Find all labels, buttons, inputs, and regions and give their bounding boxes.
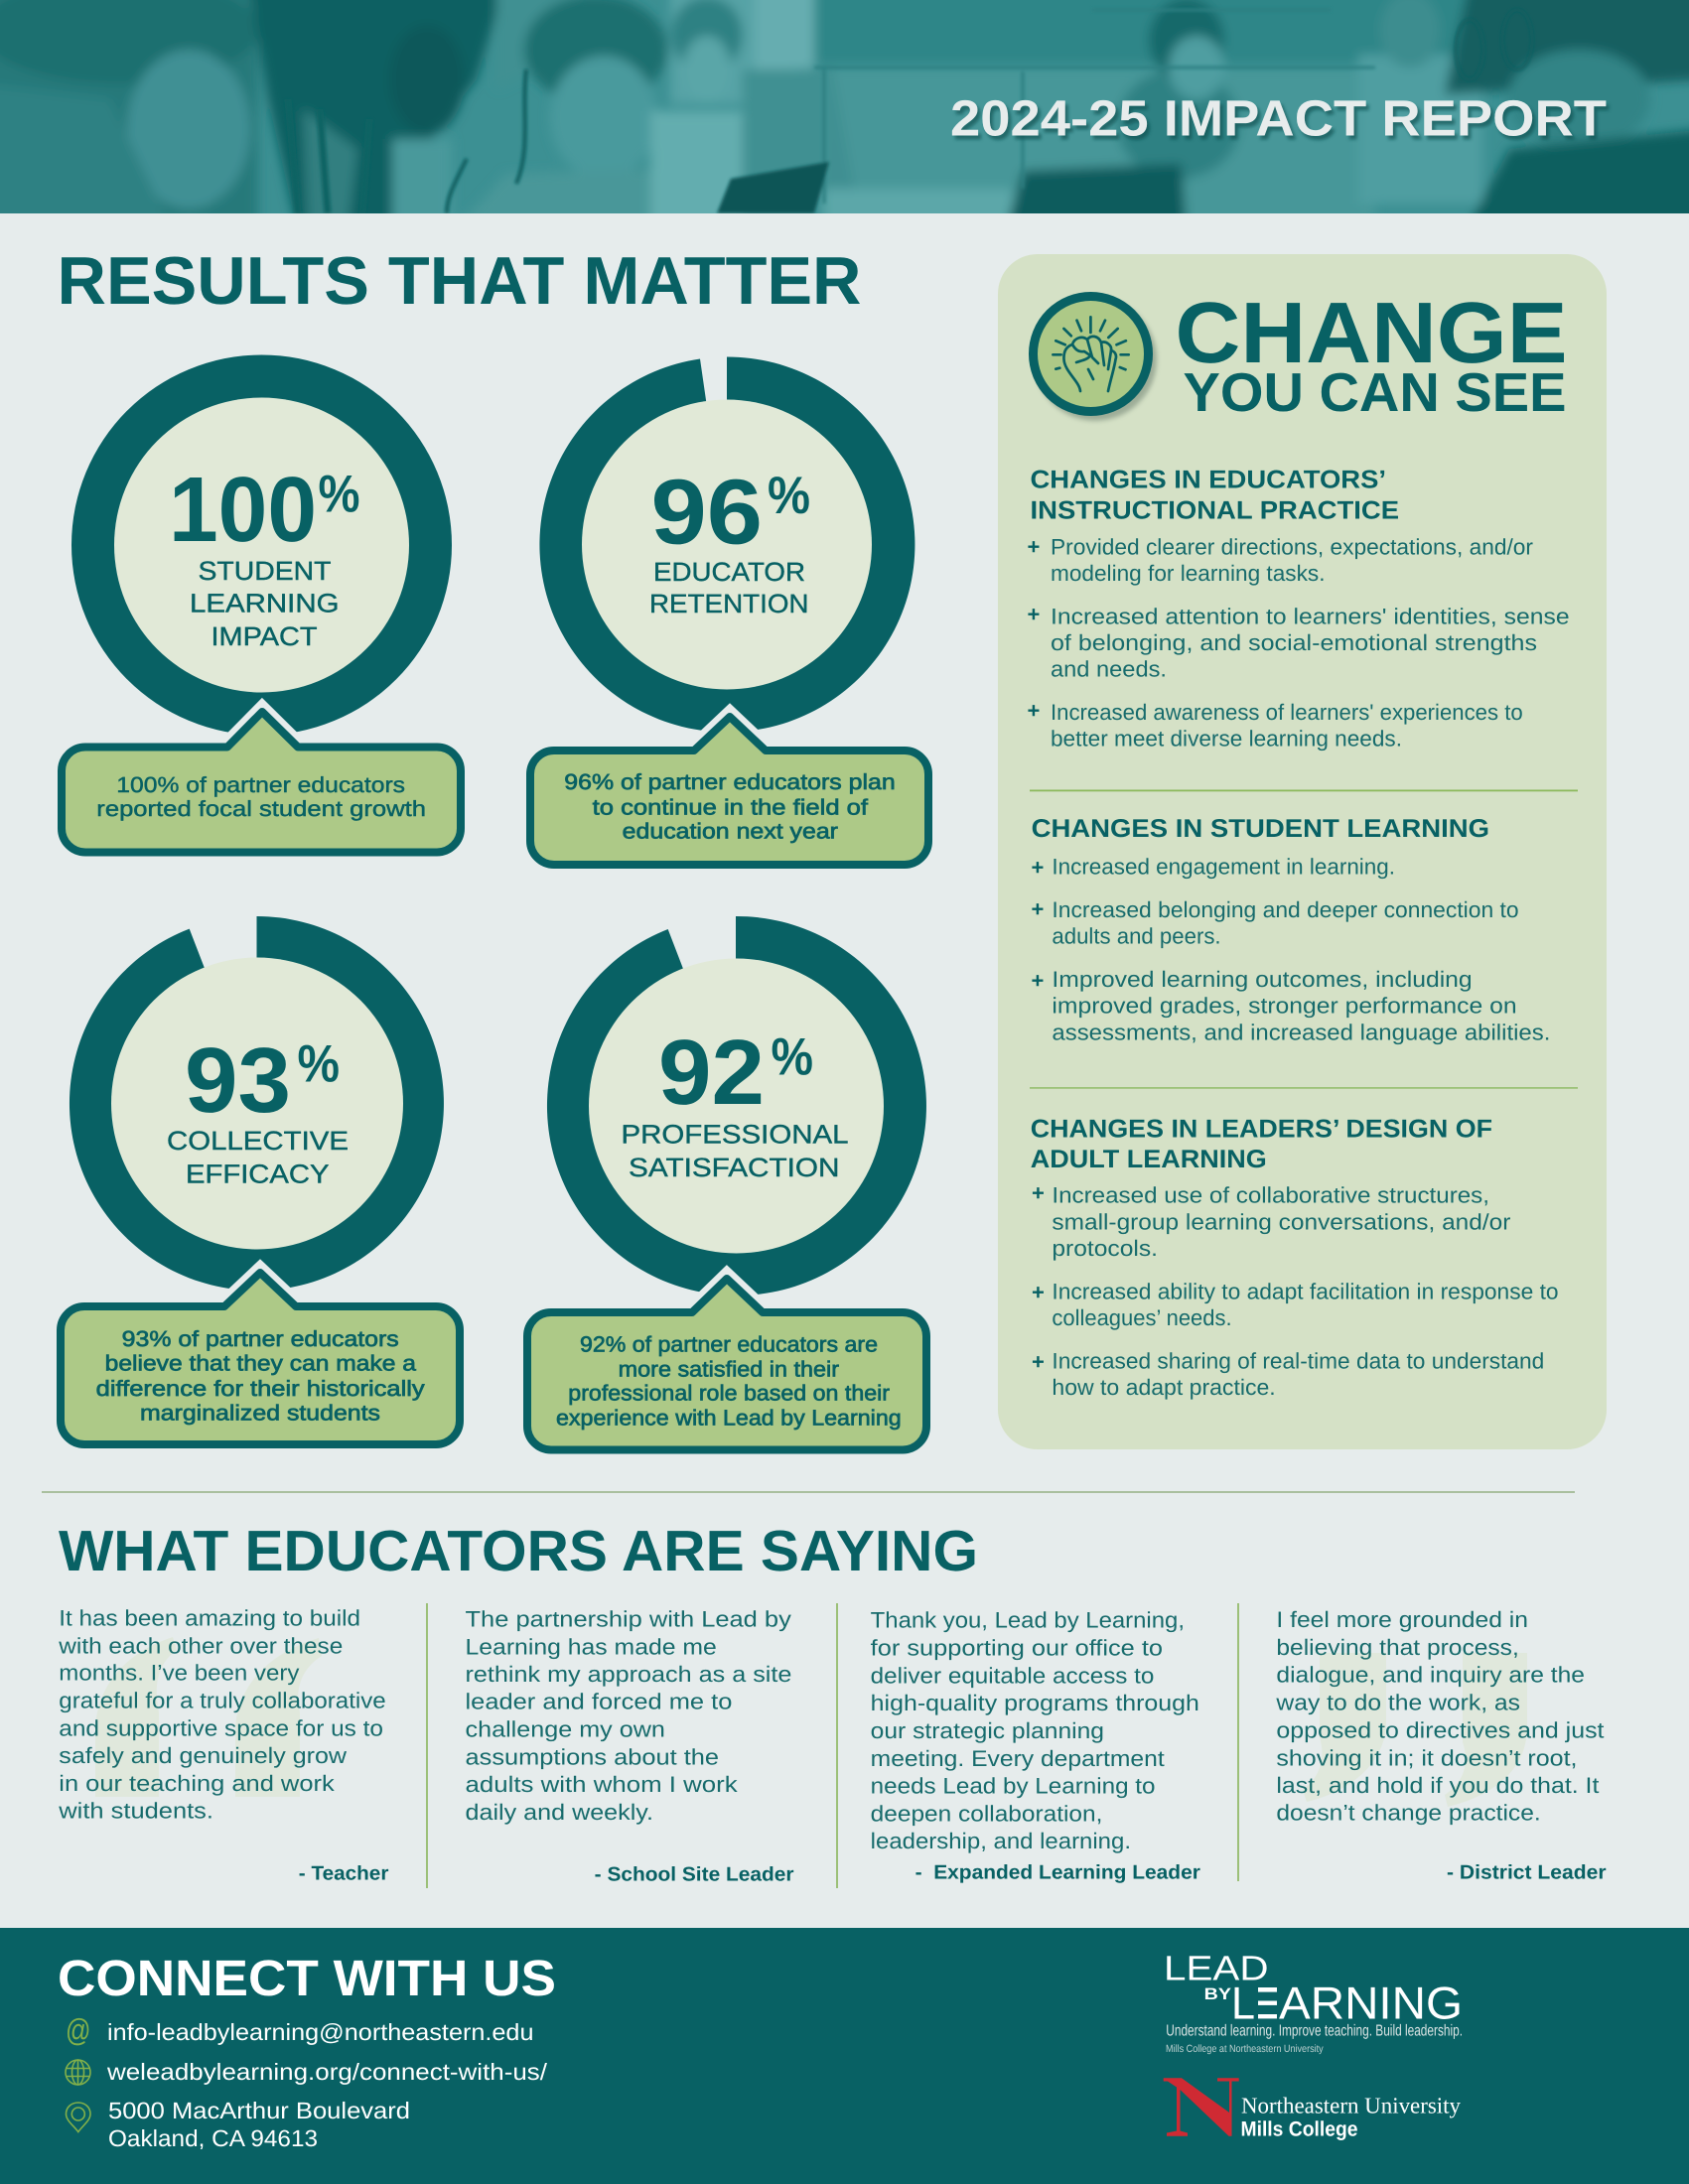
label: SATISFACTION bbox=[629, 1153, 840, 1182]
quote: teacher: months. I’ve been very bbox=[59, 1661, 300, 1686]
callout 100%: reported focal student growth bbox=[96, 796, 426, 821]
quote: expanded learning leader: for supporting our office to bbox=[871, 1636, 1163, 1661]
section: changes in student learning: Increased belonging and deeper connection to bbox=[1052, 897, 1519, 922]
decorative closing quote mark bbox=[1303, 1653, 1527, 1807]
quote: teacher: - Teacher bbox=[299, 1862, 389, 1884]
section: changes in student learning bbox=[1031, 815, 1550, 1044]
quote: teacher: with each other over these bbox=[58, 1633, 343, 1658]
stat: 100% student learning impact bbox=[62, 355, 461, 852]
label: PROFESSIONAL bbox=[622, 1120, 848, 1150]
section: changes in leaders' design of adult learning: Increased sharing of real-time data to understand bbox=[1052, 1348, 1544, 1373]
header photo banner bbox=[0, 0, 1689, 213]
label bbox=[622, 1120, 848, 1182]
callout 96%: 96% of partner educators plan bbox=[564, 769, 896, 794]
section: changes in educators' instructional practice: and needs. bbox=[1051, 657, 1167, 682]
header title: 2024-25 IMPACT REPORT bbox=[953, 93, 1610, 151]
quote: teacher: and supportive space for us to bbox=[59, 1715, 383, 1740]
section: changes in educators' instructional practice: of belonging, and social-emotional strengths bbox=[1051, 630, 1537, 655]
section: changes in educators' instructional practice bbox=[1027, 467, 1570, 751]
section: changes in student learning: Increased engagement in learning. bbox=[1052, 855, 1395, 880]
section: changes in student learning: + bbox=[1031, 855, 1044, 880]
callout 100%: 100% of partner educators bbox=[116, 772, 405, 797]
logo: northeastern university mills college: Northeastern University bbox=[1241, 2093, 1461, 2117]
logo: lead by learning: Mills College at Northeastern University bbox=[1166, 2043, 1324, 2055]
section: changes in leaders' design of adult learning: + bbox=[1032, 1349, 1045, 1374]
quote: district leader: last, and hold if you do that. It bbox=[1276, 1773, 1600, 1798]
stat: 93% collective efficacy bbox=[61, 916, 460, 1444]
section: changes in leaders' design of adult learning: Increased ability to adapt facilitation in response to bbox=[1052, 1279, 1559, 1303]
section heading: results that matter: RESULTS THAT MATTER bbox=[58, 243, 862, 319]
callout 92%: experience with Lead by Learning bbox=[556, 1405, 902, 1430]
quote: school site leader: challenge my own bbox=[465, 1717, 665, 1742]
inner circle bbox=[582, 399, 872, 689]
quote: teacher: in our teaching and work bbox=[59, 1771, 336, 1796]
callout 92%: more satisfied in their bbox=[619, 1356, 839, 1381]
panel title: CHANGE bbox=[1176, 285, 1567, 381]
quote: district leader: opposed to directives and just bbox=[1276, 1717, 1605, 1742]
quote: district leader: - District Leader bbox=[1447, 1862, 1607, 1884]
inner circle bbox=[114, 397, 409, 693]
donut ring 100% bbox=[71, 355, 452, 735]
value 96 percent: % bbox=[768, 467, 810, 525]
header title: 2024-25 IMPACT REPORT bbox=[950, 90, 1607, 147]
quote: district leader: I feel more grounded in bbox=[1276, 1607, 1528, 1632]
section: changes in student learning: adults and peers. bbox=[1052, 924, 1221, 949]
quote: expanded learning leader: - Expanded Learning Leader bbox=[915, 1862, 1200, 1884]
callout 93%: 93% of partner educators bbox=[122, 1326, 399, 1351]
label: COLLECTIVE bbox=[167, 1126, 349, 1156]
contact: website: weleadbylearning.org/connect-with-us/ bbox=[106, 2059, 548, 2085]
logo: lead by learning: ARNING bbox=[1279, 1977, 1463, 2028]
section: changes in leaders' design of adult learning: protocols. bbox=[1052, 1236, 1158, 1261]
quote: teacher: It has been amazing to build bbox=[59, 1605, 360, 1630]
connect heading: CONNECT WITH US bbox=[58, 1950, 556, 2006]
quote: school site leader: assumptions about the bbox=[465, 1745, 719, 1770]
logo: lead by learning bbox=[1164, 1949, 1463, 2055]
value 92 percent bbox=[658, 1021, 813, 1124]
inner circle bbox=[111, 957, 403, 1249]
value 100 percent: 100 bbox=[169, 458, 317, 561]
contact: email: @ bbox=[66, 2012, 91, 2048]
quote: expanded learning leader: deepen collaboration, bbox=[871, 1801, 1102, 1826]
callout 93% bbox=[61, 1273, 460, 1444]
quote: expanded learning leader: meeting. Every department bbox=[871, 1746, 1166, 1771]
label: STUDENT bbox=[199, 556, 332, 586]
value 92 percent: 92 bbox=[658, 1021, 765, 1124]
quote: school site leader: adults with whom I work bbox=[465, 1772, 739, 1797]
section: changes in educators' instructional practice: Increased attention to learners' identities, sense bbox=[1051, 604, 1570, 628]
quote: expanded learning leader: high-quality programs through bbox=[871, 1691, 1199, 1715]
contact: address: 5000 MacArthur Boulevard bbox=[108, 2098, 410, 2123]
logo: lead by learning: BY bbox=[1204, 1985, 1231, 2003]
callout 100% bbox=[62, 712, 461, 852]
value 93 percent bbox=[185, 1028, 340, 1132]
section: changes in educators' instructional practice: Increased awareness of learners' experiences to bbox=[1051, 700, 1523, 725]
section: changes in leaders' design of adult learning: + bbox=[1032, 1180, 1045, 1205]
label: EDUCATOR bbox=[653, 557, 805, 587]
callout 96%: education next year bbox=[623, 818, 838, 844]
contact: email bbox=[66, 2012, 534, 2048]
section: changes in educators' instructional practice: modeling for learning tasks. bbox=[1051, 561, 1325, 586]
quote: school site leader: - School Site Leader bbox=[595, 1863, 794, 1885]
panel: change you can see bbox=[998, 254, 1607, 1449]
value 96 percent: 96 bbox=[651, 461, 763, 564]
quote: district leader: dialogue, and inquiry are the bbox=[1276, 1663, 1585, 1688]
section: changes in educators' instructional practice: + bbox=[1027, 698, 1040, 723]
section: changes in educators' instructional practice: Provided clearer directions, expectations, and/or bbox=[1051, 534, 1534, 559]
section: changes in student learning: CHANGES IN STUDENT LEARNING bbox=[1032, 815, 1489, 843]
section: changes in educators' instructional practice: + bbox=[1027, 602, 1040, 626]
quote: expanded learning leader: deliver equitable access to bbox=[871, 1663, 1154, 1688]
quote: school site leader: The partnership with Lead by bbox=[465, 1606, 792, 1631]
quote: district leader: way to do the work, as bbox=[1275, 1690, 1520, 1714]
section: changes in educators' instructional practice: INSTRUCTIONAL PRACTICE bbox=[1031, 496, 1399, 524]
quote: district leader: shoving it in; it doesn’t root, bbox=[1276, 1745, 1577, 1770]
logo: lead by learning: L bbox=[1231, 1977, 1255, 2028]
callout 92%: 92% of partner educators are bbox=[580, 1332, 878, 1357]
quote: teacher: grateful for a truly collaborative bbox=[59, 1688, 386, 1712]
callout 92% bbox=[527, 1279, 926, 1449]
section: changes in student learning: Improved learning outcomes, including bbox=[1052, 967, 1473, 992]
callout 93%: believe that they can make a bbox=[105, 1350, 417, 1376]
quote: teacher bbox=[58, 1605, 389, 1884]
quote: teacher: with students. bbox=[58, 1799, 213, 1824]
value 100 percent: % bbox=[318, 465, 359, 524]
quote: teacher: safely and genuinely grow bbox=[59, 1743, 348, 1768]
section: changes in student learning: + bbox=[1031, 896, 1044, 921]
donut ring 93% bbox=[70, 916, 444, 1291]
label: RETENTION bbox=[649, 589, 808, 618]
section: changes in leaders' design of adult learning: Increased use of collaborative structures, bbox=[1052, 1183, 1489, 1208]
section: changes in leaders' design of adult learning: small-group learning conversations, and/or bbox=[1052, 1209, 1511, 1234]
section: changes in student learning: improved grades, stronger performance on bbox=[1052, 994, 1517, 1019]
section: changes in educators' instructional practice: better meet diverse learning needs. bbox=[1051, 727, 1402, 751]
donut ring 92% bbox=[547, 916, 926, 1296]
callout 96% bbox=[530, 717, 928, 865]
section: changes in leaders' design of adult learning: + bbox=[1032, 1280, 1045, 1304]
value 93 percent: 93 bbox=[185, 1028, 291, 1132]
label: LEARNING bbox=[190, 588, 340, 617]
callout 93%: marginalized students bbox=[140, 1401, 380, 1426]
donut ring 96% bbox=[539, 356, 915, 732]
logo: lead by learning: LEAD bbox=[1164, 1949, 1269, 1987]
value 96 percent bbox=[651, 461, 810, 564]
value 92 percent: % bbox=[771, 1028, 813, 1086]
label bbox=[167, 1126, 349, 1189]
inner circle bbox=[589, 959, 884, 1253]
callout 96%: to continue in the field of bbox=[593, 794, 869, 819]
footer band bbox=[0, 1928, 1689, 2184]
quote: school site leader: leader and forced me to bbox=[465, 1690, 732, 1714]
quote: district leader bbox=[1275, 1607, 1607, 1884]
quote: expanded learning leader: Thank you, Lead by Learning, bbox=[871, 1607, 1185, 1632]
section: changes in student learning: assessments, and increased language abilities. bbox=[1052, 1020, 1550, 1044]
quote: school site leader: Learning has made me bbox=[465, 1634, 717, 1659]
logo: northeastern university mills college bbox=[1164, 2078, 1461, 2141]
section: changes in leaders' design of adult learning: ADULT LEARNING bbox=[1031, 1146, 1267, 1173]
quote: district leader: believing that process, bbox=[1276, 1635, 1519, 1660]
logo: northeastern university mills college: Mills College bbox=[1241, 2118, 1358, 2141]
section: changes in student learning: + bbox=[1031, 968, 1044, 993]
section: changes in leaders' design of adult learning: how to adapt practice. bbox=[1052, 1375, 1276, 1400]
callout 92%: professional role based on their bbox=[568, 1381, 890, 1406]
icon: raised fist badge bbox=[1033, 296, 1157, 421]
label bbox=[190, 556, 340, 651]
section: changes in educators' instructional practice: + bbox=[1027, 534, 1040, 559]
quote: expanded learning leader: our strategic planning bbox=[871, 1718, 1104, 1743]
logo: lead by learning: Understand learning. Improve teaching. Build leadership. bbox=[1166, 2023, 1463, 2040]
contact: address bbox=[66, 2098, 410, 2151]
quote: school site leader: rethink my approach as a site bbox=[465, 1662, 791, 1687]
quote: school site leader bbox=[465, 1606, 794, 1885]
section: changes in leaders' design of adult learning bbox=[1031, 1116, 1559, 1400]
value 93 percent: % bbox=[298, 1034, 340, 1094]
section: changes in leaders' design of adult learning: CHANGES IN LEADERS’ DESIGN OF bbox=[1031, 1116, 1492, 1144]
label bbox=[649, 557, 808, 618]
quote: expanded learning leader bbox=[871, 1607, 1200, 1884]
callout 93%: difference for their historically bbox=[96, 1376, 425, 1401]
section: changes in leaders' design of adult learning: colleagues’ needs. bbox=[1052, 1305, 1232, 1330]
label: IMPACT bbox=[211, 621, 318, 651]
decorative opening quote mark bbox=[95, 1637, 322, 1797]
section: changes in educators' instructional practice: CHANGES IN EDUCATORS’ bbox=[1031, 467, 1386, 494]
quote: expanded learning leader: leadership, and learning. bbox=[871, 1829, 1131, 1853]
quote: school site leader: daily and weekly. bbox=[465, 1800, 653, 1825]
section heading: what educators are saying: WHAT EDUCATORS ARE SAYING bbox=[59, 1519, 978, 1583]
contact: address: Oakland, CA 94613 bbox=[108, 2125, 318, 2151]
label: EFFICACY bbox=[186, 1160, 330, 1189]
contact: email: info-leadbylearning@northeastern.edu bbox=[107, 2019, 534, 2045]
stat: 96% educator retention bbox=[530, 356, 928, 865]
quote: expanded learning leader: needs Lead by Learning to bbox=[871, 1774, 1156, 1799]
quote: district leader: doesn’t change practice. bbox=[1276, 1801, 1541, 1826]
stat: 92% professional satisfaction bbox=[527, 916, 926, 1449]
panel title bbox=[1176, 285, 1567, 423]
panel title: YOU CAN SEE bbox=[1184, 361, 1567, 423]
